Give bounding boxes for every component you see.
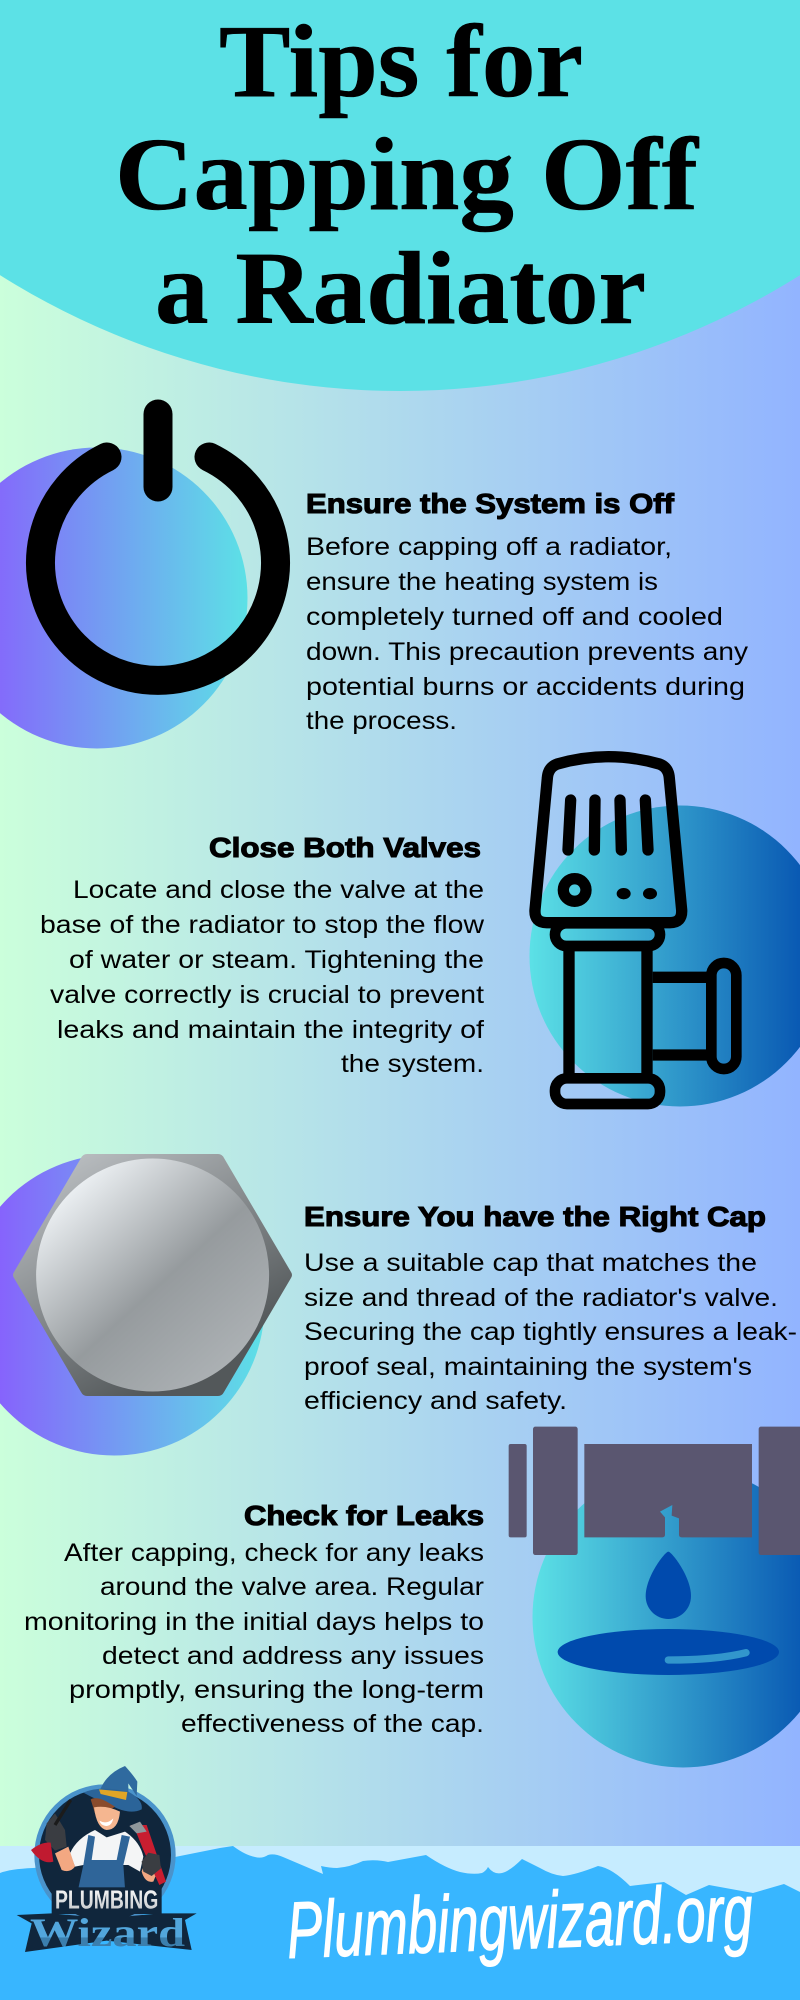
text: system off: the process.: [306, 707, 457, 735]
text: valves: valve correctly is crucial to prevent: [50, 981, 484, 1009]
text: valves: of water or steam. Tightening the: [69, 946, 484, 974]
text: right cap: Use a suitable cap that matches the: [304, 1249, 757, 1277]
text: right cap: size and thread of the radiator's valve.: [304, 1284, 778, 1312]
text: leaks: detect and address any issues: [102, 1642, 484, 1670]
text: right cap: Securing the cap tightly ensures a leak-: [304, 1318, 797, 1346]
text: valves: Locate and close the valve at the: [73, 876, 484, 904]
panel: ensure the system is off: [0, 414, 749, 748]
logo banner: wizard: Wizard: [30, 1910, 185, 1955]
text: leaks: After capping, check for any leaks: [64, 1539, 484, 1567]
text: valves: base of the radiator to stop the flow: [40, 911, 485, 939]
header panel: [0, 0, 800, 391]
text: valves: leaks and maintain the integrity of: [57, 1016, 484, 1044]
text: system off: Before capping off a radiator,: [306, 533, 672, 561]
icon: leaking pipe: [509, 1427, 800, 1675]
heading: system off: Ensure the System is Off: [306, 488, 675, 519]
title: Tips for: [219, 4, 583, 119]
text: right cap: [304, 1249, 797, 1415]
text: leaks: [24, 1539, 484, 1738]
wizard character: [31, 1766, 166, 1888]
panel: close both valves: [40, 757, 800, 1106]
title: [115, 4, 699, 346]
icon backdrop circle: [0, 1154, 264, 1456]
text: valves: [40, 876, 485, 1078]
logo wordmark: plumbing: PLUMBING: [55, 1885, 158, 1915]
heading: leaks: Check for Leaks: [244, 1500, 484, 1531]
text: leaks: promptly, ensuring the long-term: [69, 1676, 484, 1704]
icon backdrop circle: [0, 448, 248, 748]
text: leaks: around the valve area. Regular: [100, 1573, 484, 1601]
icon: radiator valve: [535, 757, 736, 1104]
text: leaks: monitoring in the initial days helps to: [24, 1608, 484, 1636]
text: system off: completely turned off and cooled: [306, 603, 723, 631]
text: right cap: proof seal, maintaining the system's: [304, 1353, 752, 1381]
text: system off: ensure the heating system is: [306, 568, 658, 596]
panel: right cap: [0, 1154, 797, 1456]
text: leaks: effectiveness of the cap.: [181, 1710, 484, 1738]
title: Capping Off: [115, 117, 699, 232]
heading: valves: Close Both Valves: [209, 832, 481, 863]
heading: right cap: Ensure You have the Right Cap: [304, 1201, 766, 1232]
text: system off: down. This precaution prevents any: [306, 638, 749, 666]
text: valves: the system.: [341, 1050, 484, 1078]
icon backdrop circle: [532, 1466, 800, 1768]
footer band: [0, 1846, 800, 2000]
text: right cap: efficiency and safety.: [304, 1387, 567, 1415]
title: a Radiator: [155, 231, 646, 346]
icon: power symbol: [40, 414, 275, 680]
text: system off: [306, 533, 749, 735]
text: system off: potential burns or accidents during: [306, 673, 745, 701]
panel: check for leaks: [24, 1427, 800, 1768]
icon backdrop circle: [530, 806, 800, 1106]
logo: plumbing wizard: [17, 1766, 197, 1955]
icon: hex cap: [13, 1154, 292, 1396]
